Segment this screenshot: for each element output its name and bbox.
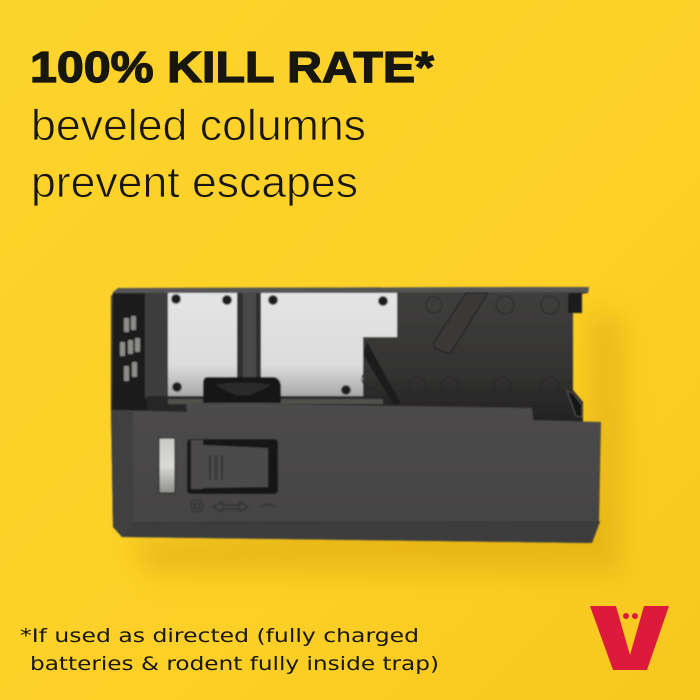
indicator window bbox=[159, 438, 175, 493]
footnote bbox=[20, 625, 439, 675]
top rim bbox=[112, 287, 589, 293]
switch well bbox=[187, 439, 278, 494]
heading: kill rate: 100% KILL RATE* bbox=[30, 43, 435, 92]
wall dimples bbox=[362, 296, 559, 395]
product: trap bbox=[111, 287, 601, 543]
footnote line 1: *If used as directed (fully charged bbox=[20, 625, 419, 647]
moulded icons bbox=[191, 500, 276, 512]
black block bbox=[203, 377, 281, 403]
right corner post bbox=[567, 391, 582, 417]
heading bbox=[30, 43, 435, 207]
back wall bbox=[111, 287, 589, 422]
contact pins bbox=[120, 316, 140, 381]
switch light edge bbox=[191, 440, 203, 489]
left column bbox=[145, 293, 167, 398]
floor bbox=[147, 396, 397, 408]
metal plate right bbox=[261, 293, 397, 396]
logo: V bbox=[590, 606, 669, 670]
bottom bevel bbox=[122, 522, 600, 543]
switch bbox=[203, 445, 268, 488]
front face bbox=[111, 403, 601, 543]
trap shadow bbox=[130, 310, 622, 572]
beveled wedge bbox=[363, 342, 401, 404]
centre column bbox=[237, 293, 261, 383]
screws bbox=[172, 294, 388, 394]
switch grip lines bbox=[210, 455, 222, 480]
slanted tab bbox=[433, 293, 488, 354]
right tab bbox=[568, 293, 582, 313]
subheading line 1: beveled columns bbox=[31, 101, 366, 150]
metal plate left bbox=[168, 293, 237, 396]
footnote line 2: batteries & rodent fully inside trap) bbox=[30, 653, 439, 675]
left interior bbox=[113, 293, 147, 411]
subheading line 2: prevent escapes bbox=[31, 158, 358, 207]
left bevel bbox=[111, 410, 133, 537]
